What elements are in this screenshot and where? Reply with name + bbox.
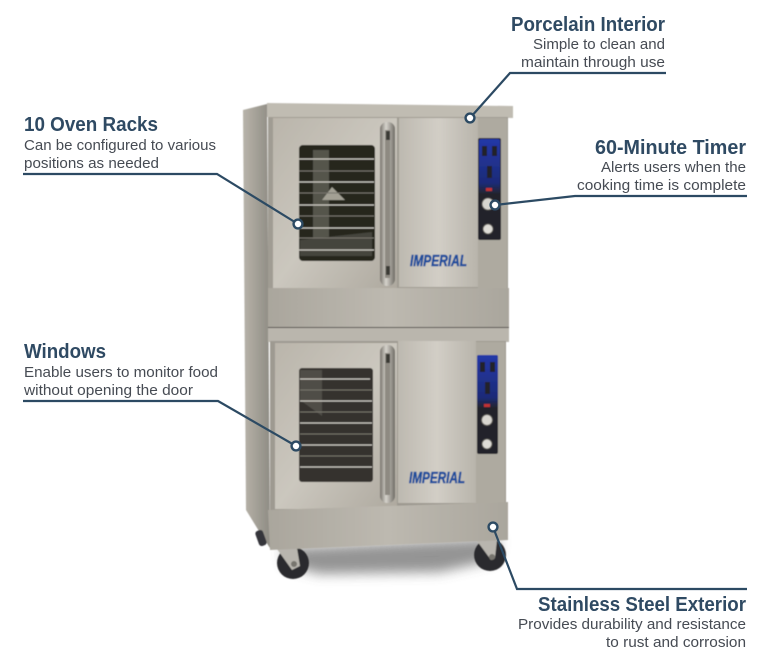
leader line [470,73,666,118]
upper left door [273,118,397,288]
lower oven [270,341,506,511]
description: cooking time is complete [577,178,746,194]
oven top plate [267,103,513,118]
rear caster [255,529,267,547]
heading: Porcelain Interior [511,14,665,36]
lower control panel [477,355,498,454]
marker dot [489,523,497,531]
leader line [23,401,296,446]
upper oven [268,117,508,289]
heading: 10 Oven Racks [24,114,158,136]
description: to rust and corrosion [606,635,746,651]
lower door handle [380,345,395,503]
lower right door [398,341,476,503]
callout: 60-Minute Timer [491,137,747,209]
upper control panel [478,138,501,240]
marker dot [466,114,474,122]
heading: 60-Minute Timer [595,137,746,159]
description: maintain through use [521,55,665,71]
leader line [495,196,747,205]
lower left door [275,343,397,509]
upper door handle [380,122,395,286]
upper right door [399,118,478,287]
description: Simple to clean and [533,37,665,53]
marker dot [292,442,300,450]
callout: Porcelain Interior [466,14,666,122]
marker dot [294,220,302,228]
callout: 10 Oven Racks [23,114,302,228]
callout: Windows [23,341,300,450]
upper window with racks [299,145,375,261]
lower window with racks [299,368,373,482]
left caster wheel [277,547,309,579]
description: positions as needed [24,156,159,172]
oven base [268,502,508,550]
lower brand logo: IMPERIAL [409,470,465,487]
heading: Stainless Steel Exterior [538,594,746,616]
callout: Stainless Steel Exterior [489,523,747,651]
description: Can be configured to various [24,138,216,154]
leader line [493,527,747,589]
marker dot [491,201,499,209]
oven left side panel [243,104,270,548]
middle band [268,288,509,327]
icon: stacked convection oven [243,103,513,579]
lower control strip [476,342,505,503]
upper control strip [478,118,507,288]
leader line [23,174,298,224]
description: without opening the door [23,383,193,399]
heading: Windows [24,341,106,363]
floor shadow [282,538,500,574]
description: Alerts users when the [601,160,746,176]
right caster wheel [474,539,506,571]
upper brand logo: IMPERIAL [410,253,467,270]
description: Enable users to monitor food [24,365,218,381]
description: Provides durability and resistance [518,617,746,633]
